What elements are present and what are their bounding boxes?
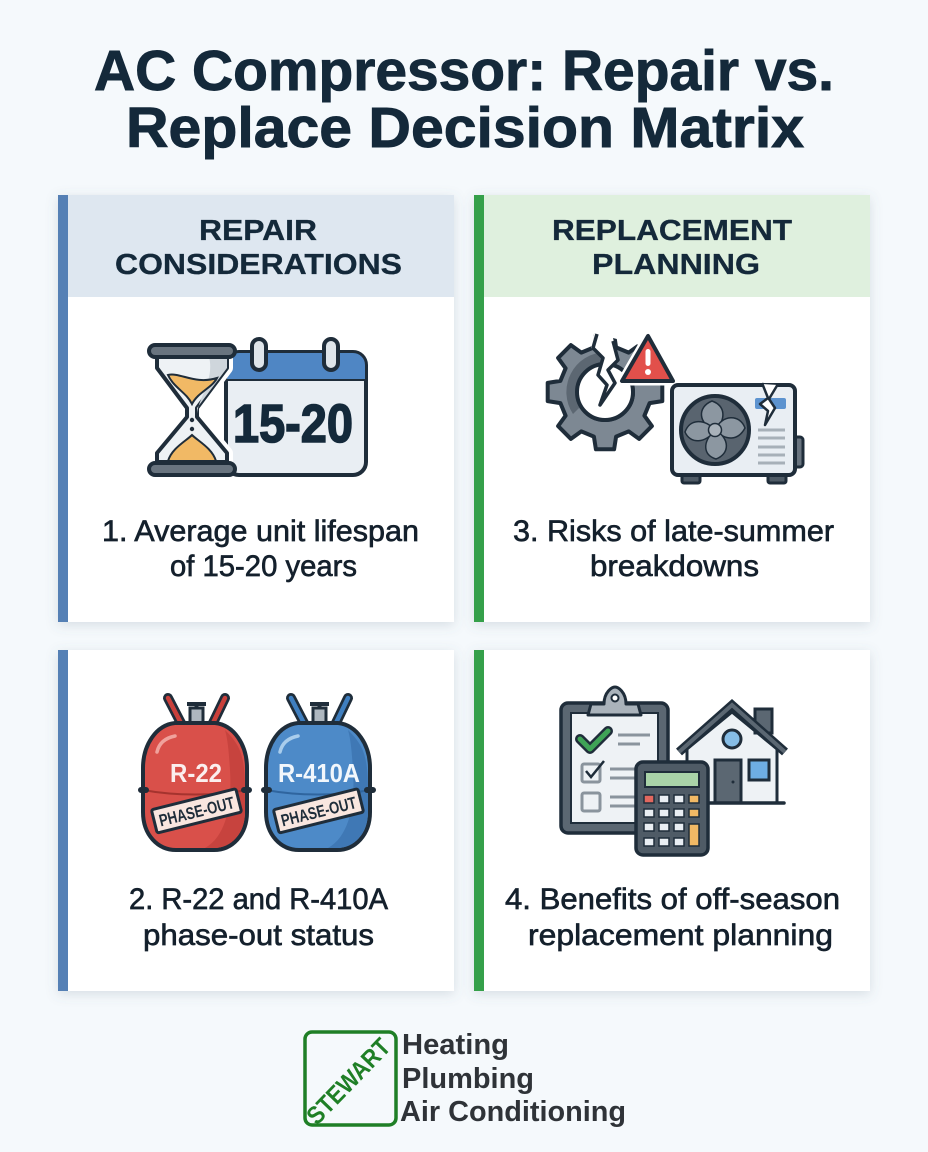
text: off-season planning: 4. Benefits of off-season: [505, 883, 840, 916]
text: average unit lifespan: [102, 515, 419, 583]
logo text: services: Plumbing: [402, 1063, 534, 1095]
title: Replace Decision Matrix: [126, 96, 804, 160]
icon: R-22 red cylinder: R-22: [170, 758, 222, 788]
text: phase-out status: 2. R-22 and R-410A: [129, 883, 388, 916]
icon: calendar showing 15-20: [226, 339, 366, 475]
icon: warning triangle: [622, 336, 673, 381]
logo text: services: Air Conditioning: [400, 1096, 626, 1128]
panel: replacement planning, late-summer risks: [474, 195, 870, 622]
panel: repair considerations, average lifespan: [58, 195, 454, 622]
text: late-summer breakdowns: 3. Risks of late-summer: [513, 515, 834, 548]
text: average unit lifespan: 1. Average unit lifespan: [102, 515, 419, 548]
icon: calendar showing 15-20: 15-20: [233, 394, 353, 454]
icon: R-22 red cylinder: PHASE-OUT: [157, 793, 237, 830]
icon: clipboard checklist: [561, 687, 668, 833]
icon: R-410A blue cylinder: [264, 698, 373, 850]
panel: off-season replacement planning: [474, 650, 870, 991]
panel header: repair considerations: [58, 195, 454, 297]
icon: hourglass: [149, 345, 235, 475]
icon: cracked gear: [548, 322, 662, 449]
logo text: services: [400, 1029, 626, 1128]
panel header: replacement planning: PLANNING: [592, 249, 760, 281]
icon: house: [679, 705, 785, 803]
title: [94, 39, 834, 160]
text: phase-out status: phase-out status: [143, 919, 374, 952]
panel header: repair considerations: CONSIDERATIONS: [115, 249, 402, 281]
text: off-season planning: replacement planning: [528, 919, 833, 952]
icon: R-22 red cylinder: [141, 698, 249, 850]
panel header: replacement planning: [474, 195, 870, 297]
text: late-summer breakdowns: [513, 515, 834, 583]
logo text: services: Heating: [402, 1029, 509, 1061]
icon: cracked outdoor AC unit: [672, 383, 803, 483]
icon: R-410A blue cylinder: PHASE-OUT: [279, 793, 359, 830]
text: average unit lifespan: of 15-20 years: [170, 550, 357, 583]
text: off-season planning: [505, 883, 840, 952]
text: late-summer breakdowns: breakdowns: [590, 550, 759, 583]
title: AC Compressor: Repair vs.: [94, 39, 834, 103]
panel header: replacement planning: REPLACEMENT: [552, 215, 792, 247]
text: phase-out status: [129, 883, 388, 952]
panel: refrigerant phase-out status: [58, 650, 454, 991]
icon: calculator: [636, 762, 708, 855]
icon: R-410A blue cylinder: R-410A: [278, 758, 360, 788]
logo: Stewart square mark: STEWART: [301, 1033, 396, 1130]
panel header: repair considerations: REPAIR: [199, 215, 317, 247]
